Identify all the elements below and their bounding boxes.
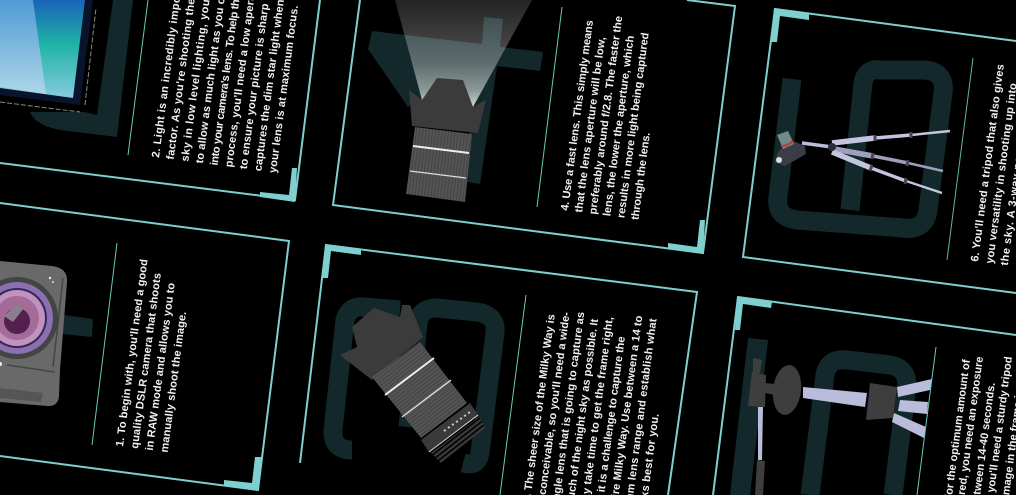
divider 5 — [917, 347, 936, 495]
light beam — [395, 0, 532, 107]
text: step 5: you'll need a sturdy tripod — [985, 356, 1015, 493]
text: step 2: your lens is at maximum focus. — [267, 5, 301, 174]
numeral 6 background — [778, 70, 943, 228]
divider 3 — [500, 295, 526, 495]
text: step 4: lens, the lower the aperture, which — [601, 35, 637, 217]
icon: DSLR camera — [0, 261, 67, 406]
frame corner 3 — [322, 245, 361, 278]
panel: step 4 fast lens — [333, 0, 735, 254]
frame 3 — [300, 245, 697, 495]
numeral 3 background — [333, 307, 495, 464]
text: step 1: manually shoot the image. — [159, 311, 189, 453]
frame 5 — [713, 297, 1016, 495]
text: step 2: to ensure your picture is sharp — [238, 3, 272, 170]
icon: lens barrel — [372, 342, 467, 438]
text: step 4: results in more light being captured — [615, 32, 652, 219]
text: step 5 — [942, 356, 1016, 495]
text: step 4: preferably around f/2.8. The faster the — [587, 15, 625, 215]
lens band lower — [402, 380, 451, 417]
text: step 2: captures the dim star light when — [252, 0, 287, 172]
panel: step 3 wide-angle lens — [300, 245, 697, 495]
frame corner 2 — [260, 168, 297, 202]
lens mount — [421, 403, 485, 463]
frame corner 1 — [224, 457, 262, 490]
panel: step 6 tripod — [743, 8, 1016, 293]
divider 4 — [537, 7, 562, 207]
numeral 1 background — [62, 315, 93, 337]
text: step 2 — [150, 0, 306, 174]
lens band lower — [410, 171, 466, 178]
frame corner 5 — [735, 297, 772, 330]
text: step 1: in RAW mode and allows you to — [144, 282, 178, 451]
frame 4 — [333, 0, 735, 253]
icon: tripod legs — [802, 131, 950, 193]
frame 1 — [0, 203, 289, 490]
text: step 3 — [521, 303, 674, 495]
lens bands — [413, 146, 469, 153]
lens bands — [385, 358, 434, 395]
text: step 6: 6. You'll need a tripod that also gives — [969, 64, 1007, 262]
text: step 1: 1. To begin with, you'll need a good — [114, 258, 151, 447]
panel: step 1 DSLR camera — [0, 203, 289, 490]
text: step 4 — [559, 12, 667, 221]
frame 6 — [743, 9, 1016, 293]
icon: lens barrel — [406, 127, 472, 202]
panel: step 5 sturdy tripod — [713, 297, 1016, 495]
text: step 1 — [114, 258, 195, 453]
text: step 4: through the lens. — [629, 132, 653, 221]
icon: camera sensor — [0, 0, 113, 115]
divider 2 — [128, 0, 148, 155]
text: step 1: quality DSLR camera that shoots — [129, 272, 164, 449]
divider 1 — [92, 243, 117, 445]
divider 6 — [947, 58, 973, 260]
icon: lens hood — [340, 305, 423, 380]
numeral 4 background — [368, 17, 543, 184]
frame corner 6 — [771, 8, 809, 42]
frame 2 — [0, 0, 320, 200]
numeral 5 background — [730, 338, 907, 495]
text: step 4: 4. Use a fast lens. This simply means — [559, 19, 596, 211]
icon: camera on tripod — [775, 131, 806, 166]
panel: step 2 sensor — [0, 0, 320, 202]
text: step 4: that the lens aperture will be low, — [573, 36, 608, 213]
icon: lens hood — [409, 78, 486, 133]
numeral 2 background — [30, 0, 133, 137]
icon: tripod close-up — [748, 358, 932, 495]
frame corner 4 — [668, 220, 705, 254]
